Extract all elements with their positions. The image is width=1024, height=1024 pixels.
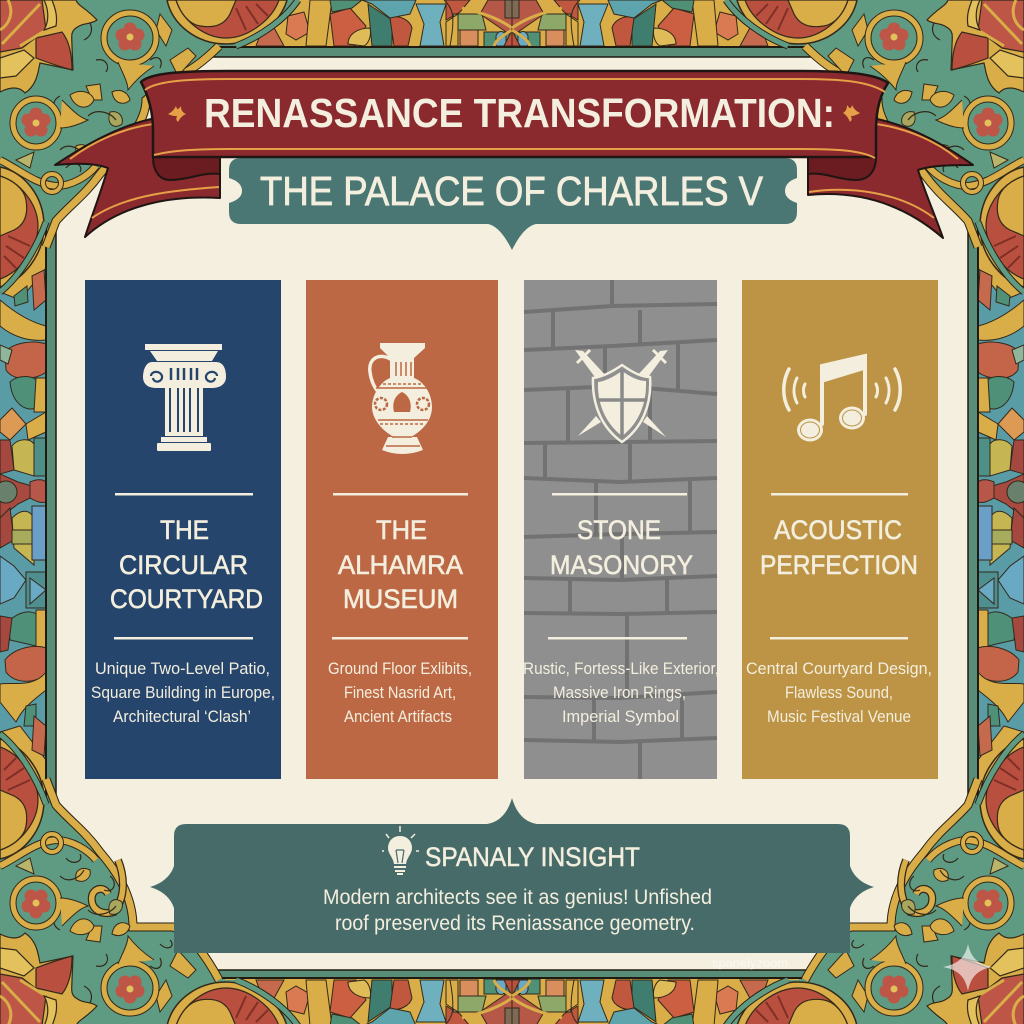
stone wall joints (524, 280, 717, 779)
description: Square Building in Europe, (91, 683, 275, 702)
corner ornament: bottom left (0, 734, 298, 1024)
description: Rustic, Fortess-Like Exterior, (523, 659, 719, 678)
heading: THE (376, 515, 427, 545)
heading: ACOUSTIC (774, 515, 902, 545)
callout: insight panel (150, 798, 874, 953)
watermark: spanelyzoom (712, 956, 788, 970)
description: Music Festival Venue (767, 707, 911, 726)
ribbon left tail (55, 118, 220, 237)
description (523, 659, 719, 726)
icon: ionic column (143, 344, 226, 451)
title ribbon (55, 71, 973, 238)
corner lobe: top left (0, 0, 298, 292)
small flower ring (13, 99, 88, 147)
subtitle plaque (229, 158, 797, 250)
description: Finest Nasrid Art, (344, 683, 456, 702)
description: Architectural ‘Clash’ (113, 707, 251, 726)
heading (338, 515, 463, 614)
border: bottom mosaic strip, right half (512, 979, 799, 1024)
description: Imperial Symbol (562, 707, 679, 726)
border: left mosaic strip (0, 215, 46, 815)
border: top mosaic strip, right half (512, 0, 799, 47)
scroll spiral (92, 860, 123, 913)
description: Ground Floor Exlibits, (328, 659, 472, 678)
description (746, 659, 932, 726)
large rose: top (167, 0, 287, 44)
description (91, 659, 275, 726)
heading: COURTYARD (110, 584, 263, 614)
ribbon right fold (808, 157, 876, 180)
panel: stone masonry (523, 280, 719, 779)
insight text: roof preserved its Reniassance geometry. (335, 912, 695, 935)
description: Flawless Sound, (785, 683, 893, 702)
heading: THE (160, 515, 209, 545)
corner lobe: bottom right (726, 734, 1024, 1024)
description: Massive Iron Rings, (553, 683, 686, 702)
corner lobe: bottom left (0, 734, 298, 1024)
ribbon right tail (808, 118, 973, 238)
panel: acoustic perfection (742, 280, 938, 779)
heading: CIRCULAR (119, 550, 248, 580)
description (328, 659, 472, 726)
heading: ALHAMRA (338, 550, 463, 580)
main cream panel (56, 57, 968, 970)
description: Unique Two-Level Patio, (95, 659, 270, 678)
corner lobe: top right (726, 0, 1024, 292)
icon: right fleuron (843, 105, 860, 122)
insight text (323, 886, 712, 935)
icon: sparkle (943, 944, 992, 991)
heading (550, 515, 693, 580)
border: top mosaic strip (225, 0, 512, 47)
panel: alhambra museum (306, 280, 498, 779)
heading (760, 515, 918, 580)
insight heading: SPANALY INSIGHT (425, 842, 640, 872)
arabesque tendrils (16, 14, 196, 168)
large rose: corner (0, 0, 97, 93)
large rose: left (0, 167, 44, 287)
heading (110, 515, 263, 614)
icon: left fleuron (168, 106, 186, 122)
description: Ancient Artifacts (344, 707, 452, 726)
heading: MUSEUM (343, 584, 458, 614)
corner ornament: top right (726, 0, 1024, 292)
heading: MASONORY (550, 550, 693, 580)
teal arcs (0, 0, 298, 292)
ribbon main band (141, 71, 888, 157)
icon: music note and sound waves (784, 356, 900, 442)
icon: light bulb (382, 826, 419, 875)
icon: shield and crossed swords (575, 350, 668, 442)
border: bottom mosaic strip (225, 979, 512, 1024)
ribbon tail trim (70, 124, 958, 218)
title text: RENASSANCE TRANSFORMATION: (204, 90, 835, 136)
ribbon left fold (153, 157, 220, 180)
description: Central Courtyard Design, (746, 659, 932, 678)
corner ornament: top left (0, 0, 298, 292)
heading: STONE (577, 515, 661, 545)
gold scroll bands (0, 160, 96, 192)
insight text: Modern architects see it as genius! Unfished (323, 886, 712, 909)
border: right mosaic strip (978, 215, 1024, 815)
corner ornament: bottom right (726, 734, 1024, 1024)
panel: circular courtyard (85, 280, 281, 779)
subtitle text: THE PALACE OF CHARLES V (260, 168, 764, 214)
icon: ornate amphora (370, 343, 432, 454)
small flower ring (104, 13, 156, 90)
heading: PERFECTION (760, 550, 918, 580)
